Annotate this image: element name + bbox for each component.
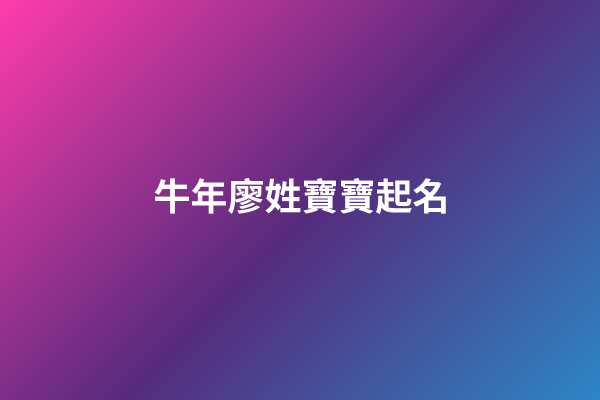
title: 牛年廖姓寶寶起名 [154,177,450,218]
